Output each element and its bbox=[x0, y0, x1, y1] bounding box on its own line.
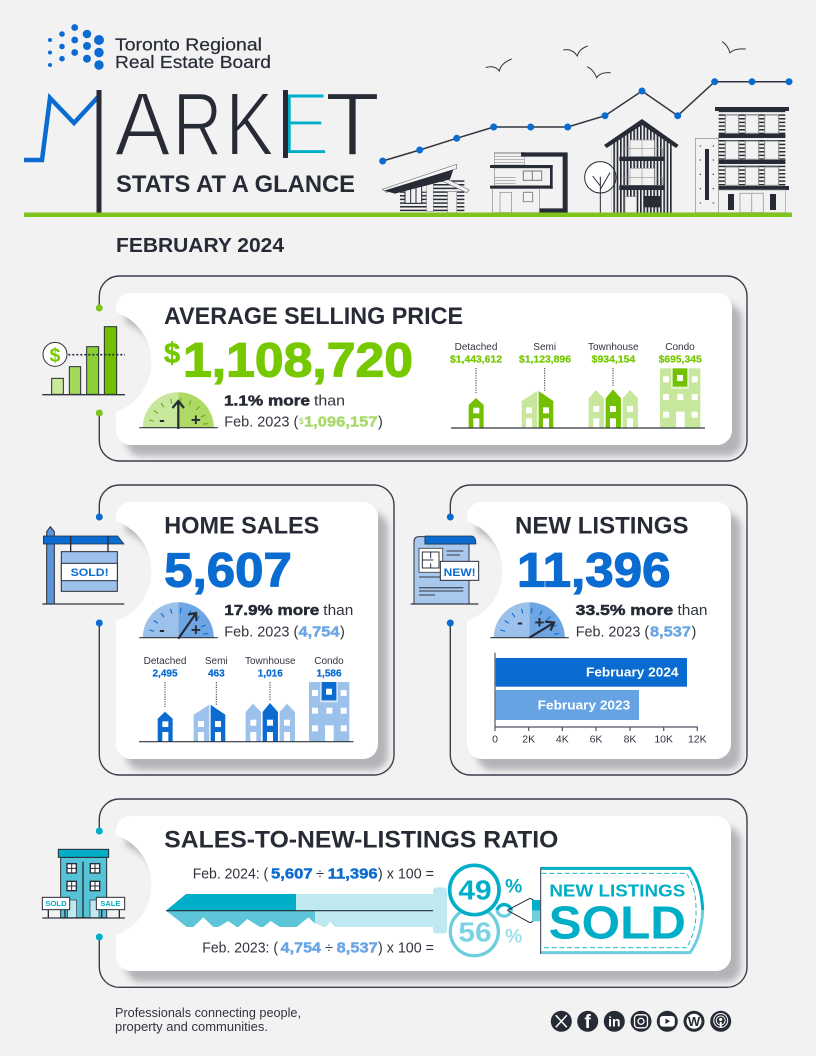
gauge bbox=[139, 392, 218, 430]
icon: apartment with sold and sale signs: SOLD bbox=[45, 899, 67, 908]
breakdown: prices by home type: $1,443,612 bbox=[450, 355, 502, 366]
heading: HOME SALES bbox=[164, 512, 319, 539]
house: modern two-storey bbox=[490, 152, 568, 213]
comparison text: 33.5% more bbox=[576, 602, 673, 619]
heading: AVERAGE SELLING PRICE bbox=[164, 303, 463, 330]
gauge: - bbox=[159, 620, 165, 640]
social media icons bbox=[551, 1011, 731, 1033]
icon: X bbox=[551, 1011, 572, 1032]
bar chart: listings comparison: February 2023 bbox=[538, 697, 630, 712]
breakdown: prices by home type: Condo bbox=[665, 342, 695, 353]
bar chart: listings comparison: 4K bbox=[556, 734, 569, 746]
big number: home sales: 5,607 bbox=[164, 545, 292, 598]
tag: new listings sold: NEW LISTINGS bbox=[549, 881, 685, 901]
title: MARKET: T bbox=[325, 75, 380, 175]
date heading: FEBRUARY 2024 bbox=[116, 235, 285, 257]
key graphic: ratio bar bbox=[166, 887, 447, 933]
formula: February 2023: ÷ bbox=[325, 940, 333, 956]
gauge: - bbox=[517, 613, 523, 632]
tree bbox=[585, 162, 616, 213]
big number: new listings: 11,396 bbox=[517, 545, 670, 598]
breakdown: sales by home type: 1,586 bbox=[316, 669, 342, 680]
gauge: + bbox=[191, 620, 201, 640]
breakdown: prices by home type: Townhouse bbox=[588, 342, 639, 353]
icon: new listing document: NEW! bbox=[444, 567, 476, 579]
icon: apartment with sold and sale signs: SALE bbox=[100, 899, 120, 908]
panel: new listings bbox=[411, 485, 747, 775]
header illustration: houses and buildings bbox=[382, 107, 789, 213]
breakdown: sales by home type: Detached bbox=[144, 656, 186, 667]
tag: new listings sold bbox=[532, 867, 703, 954]
icon: Instagram bbox=[630, 1011, 652, 1032]
title: MARKET: E bbox=[279, 74, 330, 175]
icon: new listing document bbox=[411, 536, 479, 604]
comparison text: than bbox=[323, 603, 353, 619]
bar chart: listings comparison: 8K bbox=[624, 734, 636, 746]
breakdown: prices by home type: Detached bbox=[455, 342, 497, 353]
big number: average price: 1,108,720 bbox=[183, 335, 413, 388]
breakdown: prices by home type: $1,123,896 bbox=[519, 355, 571, 366]
panel: sales-to-new-listings ratio bbox=[42, 799, 747, 987]
comparison text: than bbox=[678, 603, 708, 619]
house: shed-roof house bbox=[382, 164, 469, 213]
title: MARKET: A bbox=[114, 75, 170, 175]
formula: February 2023 bbox=[202, 940, 434, 956]
panel: average selling price bbox=[42, 276, 747, 461]
comparison text bbox=[576, 602, 708, 641]
formula: February 2024 bbox=[193, 866, 434, 882]
formula: February 2023: 8,537 bbox=[337, 940, 378, 956]
title: MARKET: K bbox=[225, 75, 274, 175]
comparison text: than bbox=[314, 394, 345, 410]
comparison text: 1,096,157 bbox=[304, 415, 378, 431]
tag: new listings sold: SOLD bbox=[549, 896, 686, 948]
panel: home sales bbox=[42, 485, 394, 775]
logo: Toronto Regional Real Estate Board: Toronto Regional bbox=[115, 34, 262, 54]
comparison text: 8,537 bbox=[650, 625, 691, 641]
breakdown: sales by home type: Condo bbox=[314, 656, 344, 667]
gauge bbox=[490, 602, 569, 638]
heading: NEW LISTINGS bbox=[515, 512, 688, 539]
gauge: + bbox=[535, 613, 545, 632]
comparison text bbox=[224, 602, 353, 641]
icon: Facebook: f bbox=[585, 1012, 592, 1033]
birds bbox=[486, 42, 746, 78]
formula: February 2023: 4,754 bbox=[281, 940, 321, 956]
formula: February 2024: Feb. 2024: ( bbox=[193, 866, 268, 882]
comparison text: 4,754 bbox=[298, 625, 340, 641]
gauge bbox=[139, 602, 218, 640]
icon: podcast bbox=[710, 1011, 731, 1032]
heading: SALES-TO-NEW-LISTINGS RATIO bbox=[164, 827, 558, 854]
icon: LinkedIn: in bbox=[608, 1013, 621, 1029]
comparison text: $ bbox=[299, 417, 304, 426]
gauge: - bbox=[159, 410, 165, 430]
breakdown: prices by home type bbox=[450, 342, 705, 428]
comparison text: 17.9% more bbox=[224, 602, 319, 619]
tagline bbox=[115, 1006, 301, 1034]
icon: WordPress bbox=[684, 1011, 704, 1032]
icon: LinkedIn bbox=[604, 1011, 625, 1032]
icon: apartment with sold and sale signs bbox=[42, 849, 125, 918]
icon: sold sign: SOLD! bbox=[71, 567, 109, 579]
formula: February 2023: ) x 100 = bbox=[378, 940, 434, 956]
formula: February 2024: ÷ bbox=[316, 866, 324, 882]
house: striped gable house bbox=[604, 119, 679, 213]
bar chart: listings comparison: 0 bbox=[492, 734, 498, 746]
breakdown: prices by home type: Semi bbox=[533, 342, 556, 353]
bar chart: listings comparison: February 2024 bbox=[586, 665, 679, 680]
breakdown: sales by home type: 2,495 bbox=[152, 669, 178, 680]
icon: YouTube bbox=[657, 1011, 678, 1032]
bar chart: listings comparison bbox=[492, 653, 707, 746]
tagline: property and communities. bbox=[115, 1020, 268, 1034]
comparison text: Feb. 2023 ( bbox=[224, 415, 298, 431]
icon: bar chart with dollar bbox=[42, 327, 125, 395]
gauge: + bbox=[191, 410, 201, 430]
breakdown: sales by home type: Semi bbox=[205, 656, 228, 667]
comparison text: Feb. 2023 ( bbox=[224, 625, 298, 641]
formula: February 2024: ) x 100 = bbox=[378, 866, 434, 882]
icon: Facebook bbox=[577, 1011, 598, 1033]
breakdown: prices by home type: $934,154 bbox=[592, 355, 636, 366]
breakdown: prices by home type: $695,345 bbox=[659, 355, 702, 366]
breakdown: sales by home type bbox=[139, 656, 354, 742]
line chart across header bbox=[379, 78, 792, 164]
big number: average price: $ bbox=[164, 338, 180, 370]
breakdown: sales by home type: 463 bbox=[208, 669, 225, 680]
logo: Toronto Regional Real Estate Board: Real Estate Board bbox=[115, 52, 271, 72]
building: apartment tower bbox=[695, 107, 789, 213]
icon: sold sign bbox=[42, 527, 124, 604]
comparison text bbox=[224, 393, 383, 431]
formula: February 2024: 5,607 bbox=[271, 866, 313, 882]
ratio circles: 49% and 56%: % bbox=[505, 877, 522, 898]
ground line bbox=[24, 212, 792, 217]
ratio circles: 49% and 56%: 56 bbox=[458, 916, 492, 947]
comparison text: Feb. 2023 ( bbox=[576, 625, 649, 641]
bar chart: listings comparison: 12K bbox=[688, 734, 707, 746]
formula: February 2023: Feb. 2023: ( bbox=[202, 940, 278, 956]
ratio circles: 49% and 56% bbox=[450, 865, 533, 956]
bar chart: listings comparison: 2K bbox=[522, 734, 535, 746]
breakdown: sales by home type: 1,016 bbox=[258, 669, 283, 680]
icon: WordPress: W bbox=[688, 1014, 701, 1029]
icon: bar chart with dollar: $ bbox=[50, 345, 61, 366]
comparison text: ) bbox=[378, 415, 383, 431]
comparison text: ) bbox=[340, 625, 345, 641]
title: MARKET bbox=[24, 90, 377, 212]
logo: Toronto Regional Real Estate Board bbox=[48, 24, 271, 72]
comparison text: ) bbox=[692, 625, 696, 641]
bar chart: listings comparison: 6K bbox=[590, 734, 602, 746]
ratio circles: 49% and 56%: % bbox=[505, 927, 522, 948]
comparison text: 1.1% more bbox=[224, 393, 310, 410]
formula: February 2024: 11,396 bbox=[328, 866, 378, 882]
title: MARKET: R bbox=[173, 75, 222, 175]
breakdown: sales by home type: Townhouse bbox=[245, 656, 296, 667]
ratio circles: 49% and 56%: 49 bbox=[458, 874, 492, 905]
subtitle: stats at a glance: STATS AT A GLANCE bbox=[116, 171, 355, 198]
tagline: Professionals connecting people, bbox=[115, 1006, 301, 1020]
bar chart: listings comparison: 10K bbox=[654, 734, 673, 746]
